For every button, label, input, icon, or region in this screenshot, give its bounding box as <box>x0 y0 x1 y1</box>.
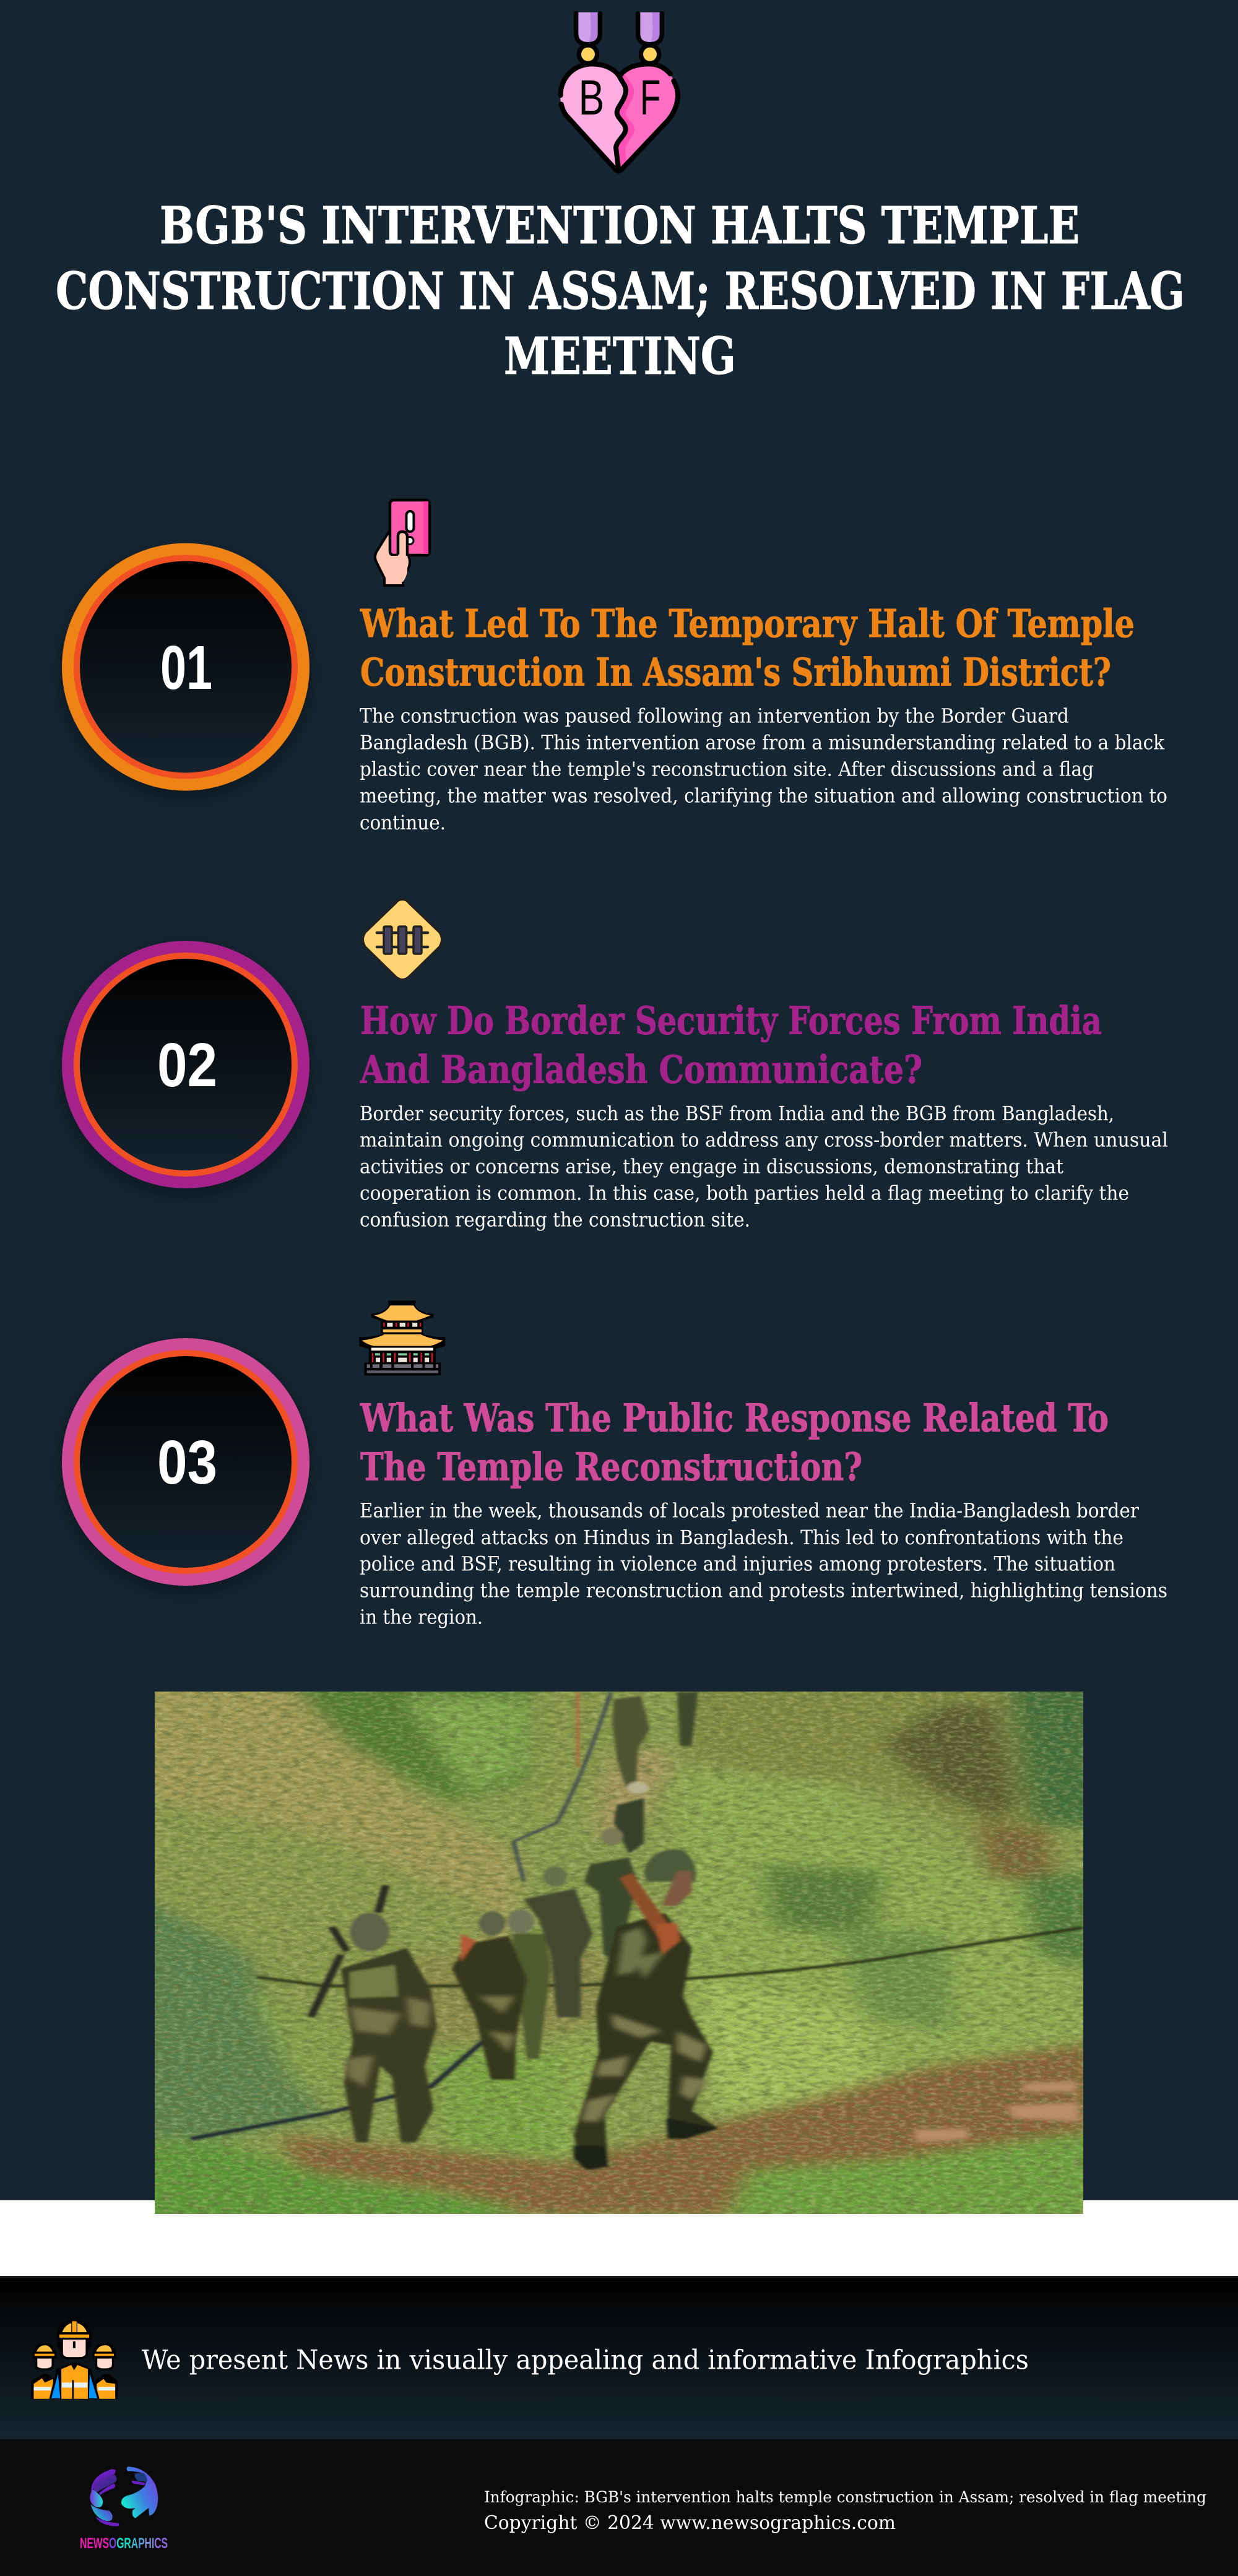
body text: in the region. <box>360 1606 483 1629</box>
photo: soldiers on hillside path <box>155 1692 1083 2214</box>
body text: activities or concerns arise, they engage in discussions, demonstrating that <box>360 1155 1063 1178</box>
icon: hand holding card <box>375 500 430 586</box>
soldier middle <box>479 1911 505 1935</box>
panel: item 03 <box>62 1300 1167 1629</box>
body text: police and BSF, resulting in violence and injuries among protesters. The situation <box>360 1552 1115 1576</box>
title <box>56 196 1185 386</box>
camouflage patches <box>479 1996 515 2052</box>
dirt stones <box>914 2081 1079 2142</box>
banner rule <box>0 2276 1238 2278</box>
body text <box>360 1499 1167 1629</box>
body text <box>360 704 1167 834</box>
number badge 03: 03 <box>157 1428 217 1497</box>
panel: tagline banner <box>0 2278 1238 2439</box>
body text: The construction was paused following an intervention by the Border Guard <box>360 704 1069 728</box>
cables <box>257 1927 1083 1986</box>
icon: railway track sign <box>363 899 442 980</box>
rear centre soldier <box>601 1828 623 1845</box>
copyright: Copyright © 2024 www.newsographics.com <box>484 2512 896 2534</box>
icon: best friend heart pendants: F <box>640 70 660 125</box>
icon: construction workers <box>31 2320 118 2399</box>
body text: maintain ongoing communication to address any cross-border matters. When unusual <box>360 1128 1168 1151</box>
white strip <box>0 2200 1238 2276</box>
number badge 02: 02 <box>157 1031 217 1100</box>
body text: Earlier in the week, thousands of locals protested near the India-Bangladesh border <box>360 1499 1140 1523</box>
logo wordmark: NEWSOGRAPHICS <box>80 2535 168 2552</box>
number badge 02 <box>62 941 310 1188</box>
main soldier <box>644 1849 696 1882</box>
body text: Border security forces, such as the BSF from India and the BGB from Bangladesh, <box>360 1102 1114 1125</box>
body text: Bangladesh (BGB). This intervention arose from a misunderstanding related to a black <box>360 730 1165 754</box>
icon: temple pagoda <box>359 1300 445 1375</box>
panel: item 01 <box>62 500 1167 834</box>
icon: best friend heart pendants: B <box>579 70 604 125</box>
heading <box>360 601 1135 694</box>
heading: And Bangladesh Communicate? <box>360 1047 922 1092</box>
body text <box>360 1102 1168 1232</box>
left soldier <box>350 1913 389 1951</box>
heading <box>360 1395 1109 1489</box>
credit line: Infographic: BGB's intervention halts temple construction in Assam; resolved in flag meeting <box>484 2488 1206 2506</box>
icon: best friend heart pendants <box>560 12 678 171</box>
soldier 3 <box>543 1866 567 1887</box>
panel: item 02 <box>62 899 1168 1232</box>
number badge 03 <box>62 1338 310 1586</box>
body text: plastic cover near the temple's reconstruction site. After discussions and a flag <box>360 758 1094 781</box>
panel: footer <box>0 2439 1238 2576</box>
heading: The Temple Reconstruction? <box>360 1445 862 1489</box>
soldier 4 back <box>508 1909 534 1934</box>
body text: cooperation is common. In this case, both parties held a flag meeting to clarify the <box>360 1181 1129 1204</box>
title: MEETING <box>504 327 736 386</box>
number badge 01 <box>62 543 310 791</box>
number badge 01: 01 <box>160 633 212 702</box>
body text: over alleged attacks on Hindus in Bangladesh. This led to confrontations with the <box>360 1526 1123 1549</box>
body text: meeting, the matter was resolved, clarifying the situation and allowing construction to <box>360 784 1167 807</box>
logo: Newsographics globe <box>90 2466 158 2526</box>
far soldiers <box>612 1696 650 1788</box>
side workers <box>31 2374 118 2399</box>
centre worker <box>49 2363 100 2399</box>
body text: continue. <box>360 811 446 834</box>
heading <box>360 998 1102 1092</box>
body text: surrounding the temple reconstruction and protests intertwined, highlighting tensions <box>360 1578 1167 1602</box>
tagline: We present News in visually appealing and informative Infographics <box>142 2345 1029 2375</box>
body text: confusion regarding the construction site. <box>360 1208 750 1232</box>
